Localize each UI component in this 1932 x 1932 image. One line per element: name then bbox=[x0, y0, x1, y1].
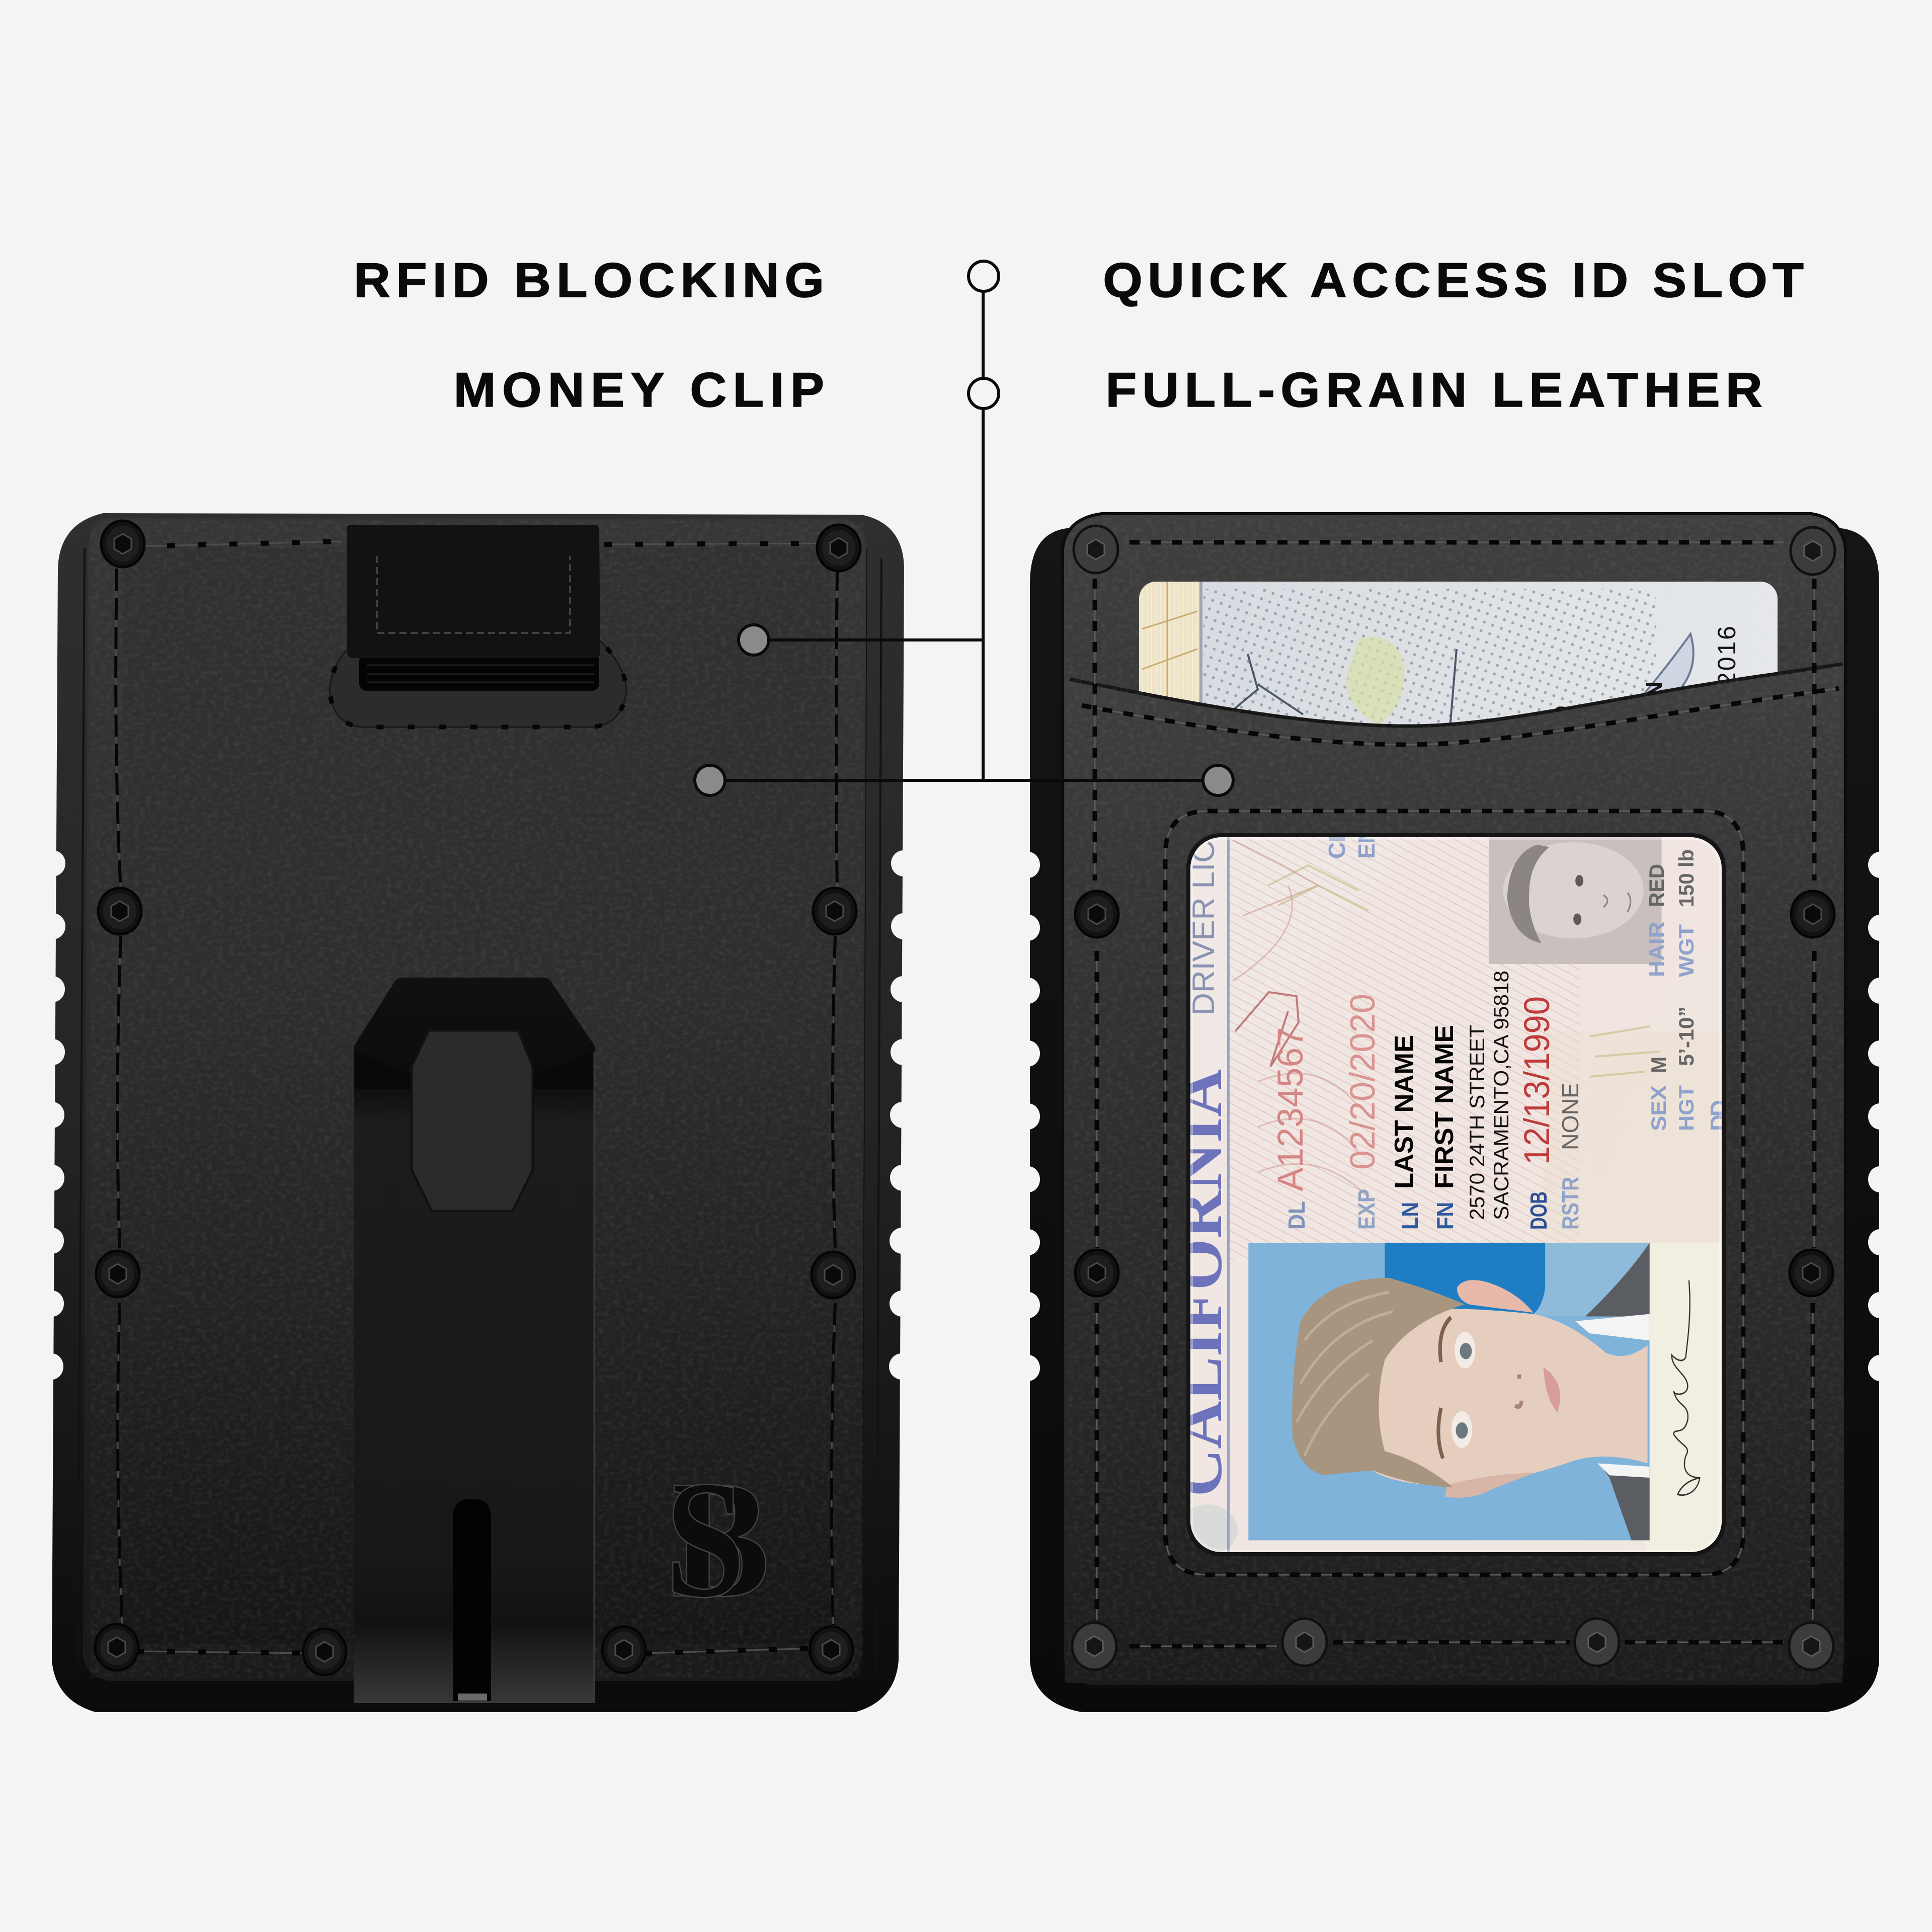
license text: NONE bbox=[1557, 1083, 1583, 1150]
label: RFID blocking: RFID BLOCKING bbox=[354, 253, 824, 307]
license text: RSTR bbox=[1557, 1177, 1583, 1230]
license text: 02/20/2020 bbox=[1343, 994, 1382, 1170]
license text: HAIR bbox=[1645, 922, 1668, 977]
license text: HGT bbox=[1674, 1085, 1698, 1131]
label: money clip: MONEY CLIP bbox=[454, 362, 824, 417]
edge notches right bbox=[889, 850, 916, 1380]
ghost portrait bbox=[1489, 830, 1662, 964]
license text: DL bbox=[1283, 1201, 1310, 1230]
license text: A1234567 bbox=[1271, 1027, 1311, 1191]
clip slot bbox=[453, 1499, 491, 1701]
pocket edge shading bbox=[1070, 664, 1842, 726]
license text: FIRST NAME bbox=[1430, 1025, 1459, 1189]
license text: EXP bbox=[1353, 1189, 1380, 1230]
license left band bbox=[1227, 837, 1230, 1552]
vertical spine bbox=[982, 292, 985, 780]
front stitching bbox=[1082, 542, 1839, 1646]
license text: 150 lb bbox=[1674, 849, 1698, 907]
license text: SEX bbox=[1647, 1085, 1670, 1131]
license text: 2570 24TH STREET bbox=[1465, 1025, 1489, 1220]
back leather panel bbox=[83, 518, 866, 1681]
edge notches left bbox=[40, 850, 65, 1380]
license guilloche marks bbox=[1233, 840, 1369, 1197]
clip edge highlight bbox=[594, 1052, 595, 1703]
license text: FN bbox=[1432, 1202, 1458, 1230]
wallet: back view with money clip bbox=[40, 513, 916, 1712]
driver license in window bbox=[1190, 837, 1722, 1552]
embossed SB logo: S bbox=[665, 1446, 746, 1633]
license text: SACRAMENTO,CA 95818 bbox=[1489, 971, 1513, 1220]
edge notches front left bbox=[1016, 852, 1040, 1381]
elastic loop slot surround bbox=[330, 635, 626, 727]
license text: M bbox=[1647, 1057, 1670, 1073]
license text: DOB bbox=[1525, 1191, 1552, 1230]
leather grain front bbox=[1066, 518, 1843, 1680]
branch to money clip and leather points bbox=[726, 779, 1202, 782]
inner card in top slot: 2016 bbox=[1713, 626, 1741, 686]
marker: RFID point bbox=[739, 625, 769, 655]
marker: top open circle bbox=[969, 261, 999, 291]
embossed SB logo: B bbox=[672, 1446, 770, 1633]
license text: RED bbox=[1645, 864, 1668, 907]
wallet: front view with ID slot bbox=[1016, 514, 1892, 1712]
inner card in top slot: N bbox=[1641, 682, 1667, 698]
leather grain bbox=[91, 521, 863, 1678]
clip shoulder shadow bbox=[354, 1049, 595, 1089]
signature bbox=[1672, 1280, 1700, 1495]
license text: DRIVER LICENSE bbox=[1186, 755, 1221, 1015]
marker: money clip point bbox=[695, 765, 725, 795]
branch to RFID blocking point bbox=[770, 638, 983, 641]
license text: DD bbox=[1706, 1100, 1732, 1131]
marker: second open circle bbox=[969, 378, 999, 409]
back leather inner pad bbox=[122, 547, 831, 1644]
wallet back metal frame bbox=[52, 513, 904, 1712]
main portrait photo bbox=[1248, 1243, 1700, 1540]
label: full-grain leather: FULL-GRAIN LEATHER bbox=[1106, 362, 1762, 417]
connector lines with markers bbox=[695, 261, 1233, 795]
clip cutout bbox=[412, 1030, 533, 1211]
frame rail grooves bbox=[78, 548, 881, 1670]
front screws bbox=[1072, 526, 1835, 1670]
license text: 12/13/1990 bbox=[1517, 996, 1557, 1165]
license text: CL bbox=[1324, 828, 1350, 859]
license background bbox=[1190, 837, 1722, 1552]
front leather plate bbox=[1063, 514, 1845, 1686]
license text: 5’-10” bbox=[1674, 1006, 1698, 1066]
license seal bbox=[1177, 1504, 1238, 1555]
marker: leather point bbox=[1203, 765, 1233, 795]
front pocket bbox=[1065, 664, 1842, 1683]
inner card in top slot bbox=[1139, 582, 1778, 725]
license text: EN bbox=[1353, 827, 1380, 859]
license text: LAST NAME bbox=[1390, 1035, 1419, 1189]
license text: CALIFORNIA bbox=[1162, 1069, 1236, 1497]
window glass glare at the card edge bbox=[1190, 837, 1722, 1552]
ID window frame bbox=[1186, 833, 1726, 1556]
license text: LN bbox=[1397, 1202, 1423, 1230]
license text bbox=[1162, 755, 1732, 1497]
inner card in top slot: 0 bbox=[1551, 706, 1573, 717]
money clip bbox=[354, 978, 595, 1703]
license text: WGT bbox=[1674, 924, 1698, 977]
leather tab bbox=[347, 525, 600, 658]
front side rails bbox=[1030, 528, 1879, 1712]
edge notches front right bbox=[1868, 852, 1892, 1381]
back stitching bbox=[116, 541, 837, 1653]
screws bbox=[95, 521, 860, 1675]
label: quick access ID slot: QUICK ACCESS ID SLOT bbox=[1103, 253, 1804, 307]
